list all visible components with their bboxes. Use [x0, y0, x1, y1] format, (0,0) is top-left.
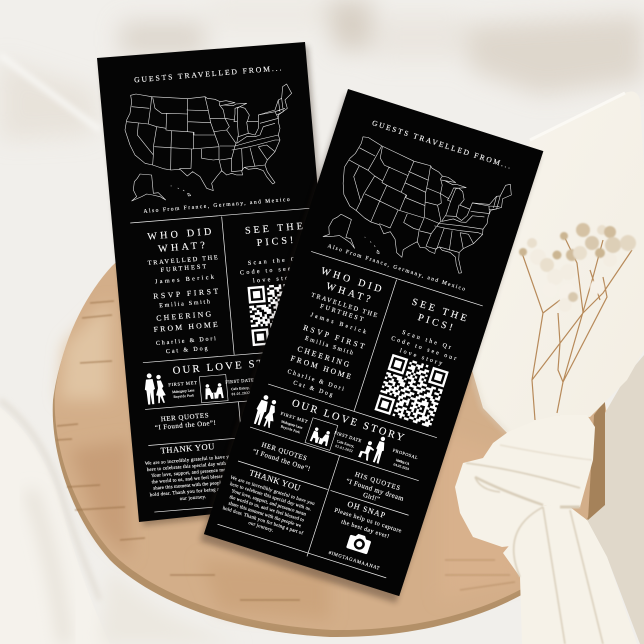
back thank you: THANK YOU — [160, 441, 216, 456]
front his quotes: HIS QUOTES — [354, 471, 401, 492]
flowers: dried baby's breath — [519, 223, 636, 420]
front card — [204, 89, 543, 596]
front first date text: FIRST DATE — [334, 430, 362, 443]
back who did what column: FURTHEST — [160, 263, 207, 274]
back thank you: Your love, support, and presence mean — [151, 468, 231, 479]
front who did what column: Emilia Smith — [304, 336, 354, 357]
back who did what column: TRAVELLED THE — [147, 254, 218, 267]
back thank you: share this moment with the people we — [153, 480, 231, 492]
back who did what column: WHAT? — [158, 240, 206, 255]
back who did what column: CHEERING — [156, 309, 212, 323]
back first met text — [168, 380, 198, 399]
front who did what column: RSVP FIRST — [302, 323, 366, 351]
back who did what column — [145, 226, 226, 356]
front who did what column: CHEERING — [296, 344, 351, 369]
front see the pics column: Scan the Qr — [401, 330, 452, 351]
front icon: couple — [252, 394, 281, 429]
front who did what column: James Berick — [310, 312, 367, 336]
background: fabric fold lower left — [0, 400, 240, 644]
front who did what column: TRAVELLED THE — [310, 292, 378, 319]
front see the pics column: Code to see our — [390, 336, 457, 362]
front oh snap: OH SNAP — [346, 499, 387, 520]
back QR code — [247, 282, 313, 346]
front first met text: Bayside Park — [280, 424, 301, 434]
front who did what column — [283, 265, 387, 404]
front oh snap: Please help us to capture — [334, 508, 402, 535]
napkin knot and tail — [455, 415, 637, 644]
back card text and layout — [110, 62, 339, 516]
front who did what column: FURTHEST — [319, 303, 364, 323]
back her quotes: HER QUOTES — [161, 412, 209, 423]
front hashtag: #IMGTAGAMAANAT — [328, 551, 380, 572]
front who did what column: Cat & Dog — [292, 380, 333, 398]
back who did what column: Emilia Smith — [159, 299, 210, 309]
front thank you: Your love, support, and presence mean — [231, 489, 307, 518]
back who did what column: RSVP FIRST — [153, 287, 219, 301]
back first date text: FIRST DATE — [225, 377, 254, 385]
back first met text: FIRST MET — [168, 380, 197, 387]
back see the pics column: Scan the Qr — [248, 257, 300, 267]
back card — [97, 42, 345, 522]
back see the pics column: love story — [253, 275, 298, 285]
back who did what column: FROM HOME — [153, 320, 218, 334]
front oh snap: the best day ever! — [340, 519, 390, 540]
back who did what column: Charlie & Dori — [156, 336, 216, 347]
front thank you: the world to us, and we feel blessed to — [229, 495, 305, 524]
back her quotes — [154, 412, 216, 432]
front thank you: share this moment with the people we — [228, 501, 302, 529]
back map caption: Also From France, Germany, and Mexico — [143, 197, 290, 215]
front his quotes: Girl!” — [362, 492, 380, 504]
back thank you: here to celebrate this special day with us. — [147, 461, 234, 473]
front QR code — [374, 354, 449, 428]
front thank you: THANK YOU — [248, 467, 302, 493]
front proposal text: 04.05.2024 — [393, 462, 410, 471]
front proposal text: PROPOSAL — [392, 448, 419, 460]
front thank you: here to celebrate this special day with us. — [229, 482, 312, 513]
front first date text: 01.01.2022 — [335, 444, 354, 453]
back see the pics column — [236, 221, 310, 286]
front her quotes: “I Found the One”! — [252, 448, 311, 473]
back see the pics column: SEE THE — [244, 221, 303, 237]
front see the pics column: PICS! — [416, 312, 454, 334]
front first date text: Cafe Eatery, — [336, 439, 355, 449]
front first date text — [330, 430, 362, 455]
front icon: camera — [346, 532, 372, 554]
front see the pics column: SEE THE — [410, 297, 468, 324]
front first met text: FIRST MET — [280, 411, 309, 424]
front card shadow — [200, 94, 540, 603]
background: beige cloth right — [587, 355, 644, 644]
back first date text: Cafe Eatery, — [231, 386, 250, 392]
front who did what column: WHAT? — [325, 281, 372, 305]
back title: GUESTS TRAVELLED FROM... — [134, 63, 282, 84]
back see the pics column: PICS! — [256, 235, 294, 249]
front thank you: We are so incredibly grateful to have you — [230, 476, 316, 507]
back who did what column: James Berick — [155, 275, 215, 285]
front map caption: Also From France, Germany, and Mexico — [327, 243, 466, 293]
front see the pics column — [387, 294, 470, 371]
front oh snap — [331, 496, 406, 543]
back her quotes: “I Found the One”! — [155, 420, 216, 432]
front first met text — [276, 411, 309, 436]
back who did what column: WHO DID — [147, 227, 212, 243]
back card US map — [125, 84, 292, 201]
front US map — [317, 124, 515, 296]
back our love story heading: OUR LOVE STORY — [172, 356, 292, 377]
back thank you: hold dear. Thank you for being a part of — [150, 486, 236, 498]
back thank you — [143, 440, 238, 505]
front thank you: our journey. — [248, 521, 274, 534]
front who did what column: Charlie & Dori — [286, 369, 345, 393]
back thank you: We are so incredibly grateful to have you — [145, 455, 235, 467]
back first met text: Bayside Park — [173, 393, 194, 399]
front see the pics column: love story — [399, 348, 443, 367]
back thank you: the world to us, and we feel blessed to — [152, 474, 232, 485]
front thank you — [218, 462, 320, 543]
wooden round board — [53, 218, 608, 637]
back card shadow — [100, 46, 347, 526]
back who did what column: Cat & Dog — [166, 346, 208, 355]
front who did what column: WHO DID — [319, 266, 383, 295]
front first met text: Mahogany Lane — [281, 419, 303, 430]
front thank you: hold dear. Thank you for being a part of — [222, 506, 304, 537]
front icon: table date — [305, 418, 338, 450]
back icon: table date — [199, 375, 228, 403]
back thank you: our journey. — [180, 495, 206, 502]
back icon: couple — [143, 372, 166, 405]
back see the pics column: Code to see our — [240, 265, 309, 277]
back first date text: 01.01.2022 — [231, 391, 250, 396]
front who did what column: FROM HOME — [290, 353, 353, 381]
napkin upper fold — [472, 92, 644, 434]
front his quotes: “I Found my dream — [345, 478, 405, 503]
front proposal text: Hartley, CA — [395, 458, 411, 467]
back first met text: Mahogany Lane — [172, 388, 195, 394]
front icon: proposal — [358, 431, 388, 465]
front our love story heading: OUR LOVE STORY — [290, 398, 406, 444]
front her quotes: HER QUOTES — [261, 442, 308, 463]
front his quotes — [343, 469, 408, 511]
back first date text — [225, 377, 255, 397]
front proposal text — [388, 448, 419, 473]
front title: GUESTS TRAVELLED FROM... — [371, 118, 512, 171]
